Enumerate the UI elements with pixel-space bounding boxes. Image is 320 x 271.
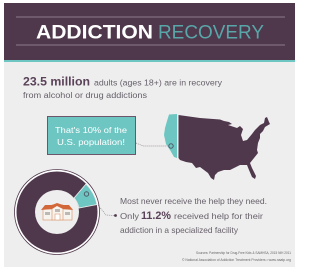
- text block: sources: © National Association of Addiction Treatment Providers • www.naatp.org: [182, 258, 291, 262]
- connector: callout to map: [136, 143, 168, 146]
- text block: key statistic: adults (ages 18+) are in recovery: [94, 78, 222, 88]
- map: west coast highlighted: [164, 114, 177, 158]
- callout: population share: U.S. population!: [57, 137, 125, 147]
- text block: help statistic: 11.2%: [141, 210, 171, 222]
- segment marker: [84, 192, 89, 196]
- callout: population share: That's 10% of the: [55, 125, 127, 135]
- text block: help statistic: received help for their: [174, 211, 263, 221]
- text block: key statistic: [23, 76, 222, 100]
- map: United States: [164, 114, 270, 180]
- text block: key statistic: 23.5 million: [23, 76, 90, 88]
- text block: help statistic: Most never receive the help they need.: [120, 196, 267, 206]
- map: rest of country: [178, 115, 270, 180]
- map: location marker: [169, 144, 173, 148]
- title: ADDICTION: [36, 22, 153, 44]
- text block: sources: Sources: Partnership for Drug-Free Kids & SAMHSA, 2015 NIH 2011: [196, 251, 291, 255]
- callout: population share: [48, 116, 136, 154]
- title: [36, 22, 264, 44]
- text block: help statistic: Only: [120, 211, 140, 221]
- text block: key statistic: from alcohol or drug addictions: [23, 91, 147, 100]
- text block: sources: [182, 251, 291, 262]
- connector: donut to text: [98, 205, 115, 216]
- chart segment: 11.2%: [74, 184, 97, 208]
- title: RECOVERY: [158, 22, 264, 44]
- donut chart: 11.2% received specialized help: [14, 170, 100, 254]
- text block: help statistic: addiction in a specialized facility: [120, 225, 239, 235]
- panel: header banner: [4, 3, 295, 62]
- text block: help statistic: [120, 196, 267, 235]
- icon: treatment facility building: [41, 203, 73, 220]
- bullet marker: [114, 214, 117, 217]
